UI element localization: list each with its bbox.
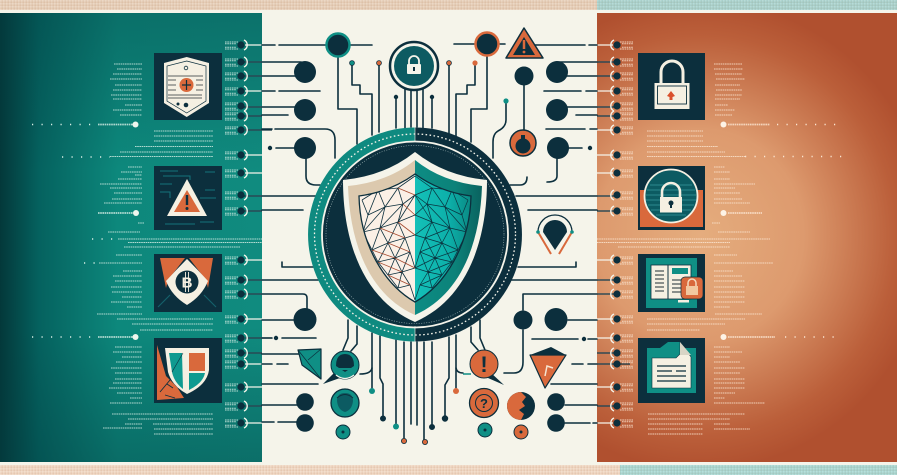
icon: small teal dot ring bbox=[478, 423, 492, 437]
icon: orange keyhole node bbox=[510, 130, 536, 156]
icon: small orange dot ring bbox=[514, 425, 528, 439]
icon tile: warning triangle bbox=[154, 166, 222, 230]
teal accent stub bbox=[463, 373, 471, 375]
right bullet dots bbox=[720, 122, 726, 340]
central emblem bbox=[308, 127, 522, 342]
icon: teal kite bbox=[298, 349, 321, 379]
icon: torn orange ring bbox=[507, 392, 535, 420]
mesh lines bbox=[362, 176, 468, 300]
icon: teal ring node bbox=[326, 34, 350, 56]
seam bbox=[414, 127, 416, 342]
left connector dark lines bbox=[240, 62, 272, 406]
trace end dots bbox=[268, 60, 592, 445]
mesh outline bbox=[359, 174, 471, 302]
panel: right orange bbox=[597, 13, 897, 462]
dark circuit nodes bbox=[294, 61, 569, 432]
circuit traces: right side bbox=[454, 44, 597, 423]
mesh panel right bbox=[415, 174, 471, 302]
icon tile: book with lock bbox=[638, 254, 705, 312]
icon: small teal ring bbox=[336, 425, 350, 439]
icon tile: shield document bbox=[154, 53, 222, 120]
right micro text lines bbox=[597, 64, 775, 434]
circuit traces: left side bbox=[262, 45, 372, 422]
left sparse dotted leaders bbox=[32, 124, 118, 337]
right white connector stubs bbox=[597, 45, 613, 423]
icon: orange question ring bbox=[470, 388, 498, 418]
icon: orange exclamation bubble bbox=[470, 350, 504, 385]
icon: orange exclamation bubble: ! bbox=[480, 352, 488, 377]
ring dots bbox=[314, 134, 516, 335]
top texture band bbox=[0, 0, 897, 10]
left micro text lines bbox=[97, 64, 262, 434]
left white connector stubs bbox=[245, 45, 262, 423]
shield teal half bbox=[415, 160, 482, 315]
icon tile: round padlock bbox=[638, 166, 705, 230]
icon: teal face ring bbox=[331, 389, 359, 417]
icon tile: cracked shield bbox=[154, 338, 222, 403]
icon tile: padlock bbox=[638, 53, 705, 120]
circuit traces: top bbox=[338, 56, 506, 158]
ring left half bbox=[308, 128, 415, 342]
inner dotted ring bbox=[326, 146, 504, 324]
left connector nodes bbox=[225, 40, 247, 428]
icon: warning triangle top bbox=[506, 28, 543, 58]
shield beige half bbox=[348, 160, 415, 315]
bottom texture band bbox=[0, 465, 897, 475]
icon tile: bitcoin envelope bbox=[154, 254, 222, 312]
icon: padlock badge top bbox=[390, 42, 438, 90]
right connector dark lines bbox=[597, 62, 630, 406]
ring right half bbox=[415, 128, 522, 342]
icon tile: document folder bbox=[638, 338, 705, 403]
shield outer cream bbox=[343, 152, 487, 322]
panel: left teal bbox=[0, 13, 262, 462]
inner cream ring bbox=[322, 142, 508, 328]
icon tile: bitcoin envelope: B bbox=[182, 274, 193, 292]
right sparse dotted leaders bbox=[745, 124, 846, 337]
icon: teal speech ring bbox=[323, 351, 359, 384]
right connector nodes bbox=[611, 40, 633, 428]
left bullet dots bbox=[132, 122, 139, 340]
icon: orange triangle gem bbox=[530, 347, 566, 388]
icon: orange question ring: ? bbox=[480, 396, 488, 411]
icon: location pin outline bbox=[536, 215, 574, 254]
icon: orange ring node bbox=[476, 32, 498, 56]
mesh panel left bbox=[359, 174, 415, 302]
circuit traces: bottom bbox=[343, 320, 485, 440]
